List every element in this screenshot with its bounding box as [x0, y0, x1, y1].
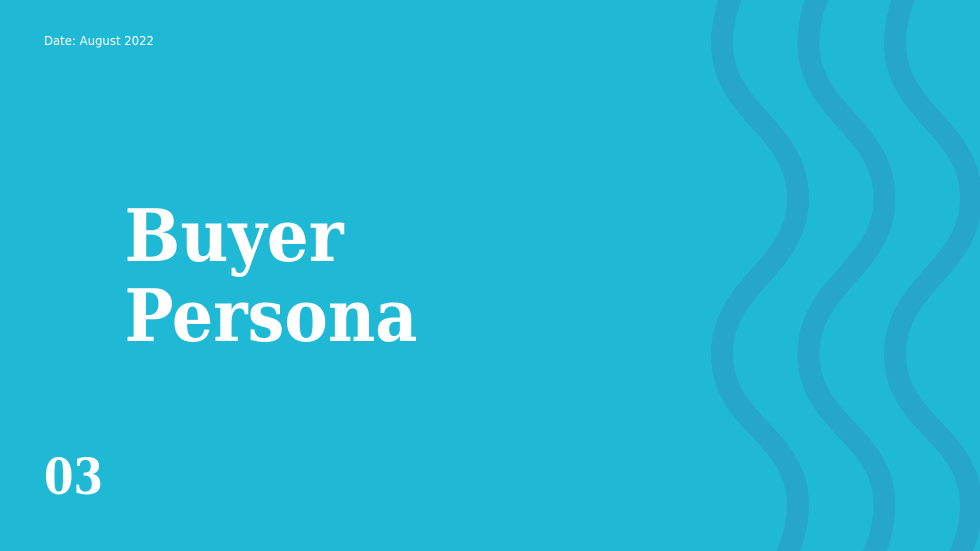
section number: 03	[44, 447, 103, 506]
wave 1	[722, 0, 798, 551]
wave 2	[808, 0, 884, 551]
wave 3	[895, 0, 971, 551]
title line 2: Persona	[124, 273, 418, 358]
date label: Date: August 2022	[44, 33, 154, 48]
decorative waves	[722, 0, 971, 551]
title	[124, 193, 418, 358]
title line 1: Buyer	[124, 193, 344, 278]
